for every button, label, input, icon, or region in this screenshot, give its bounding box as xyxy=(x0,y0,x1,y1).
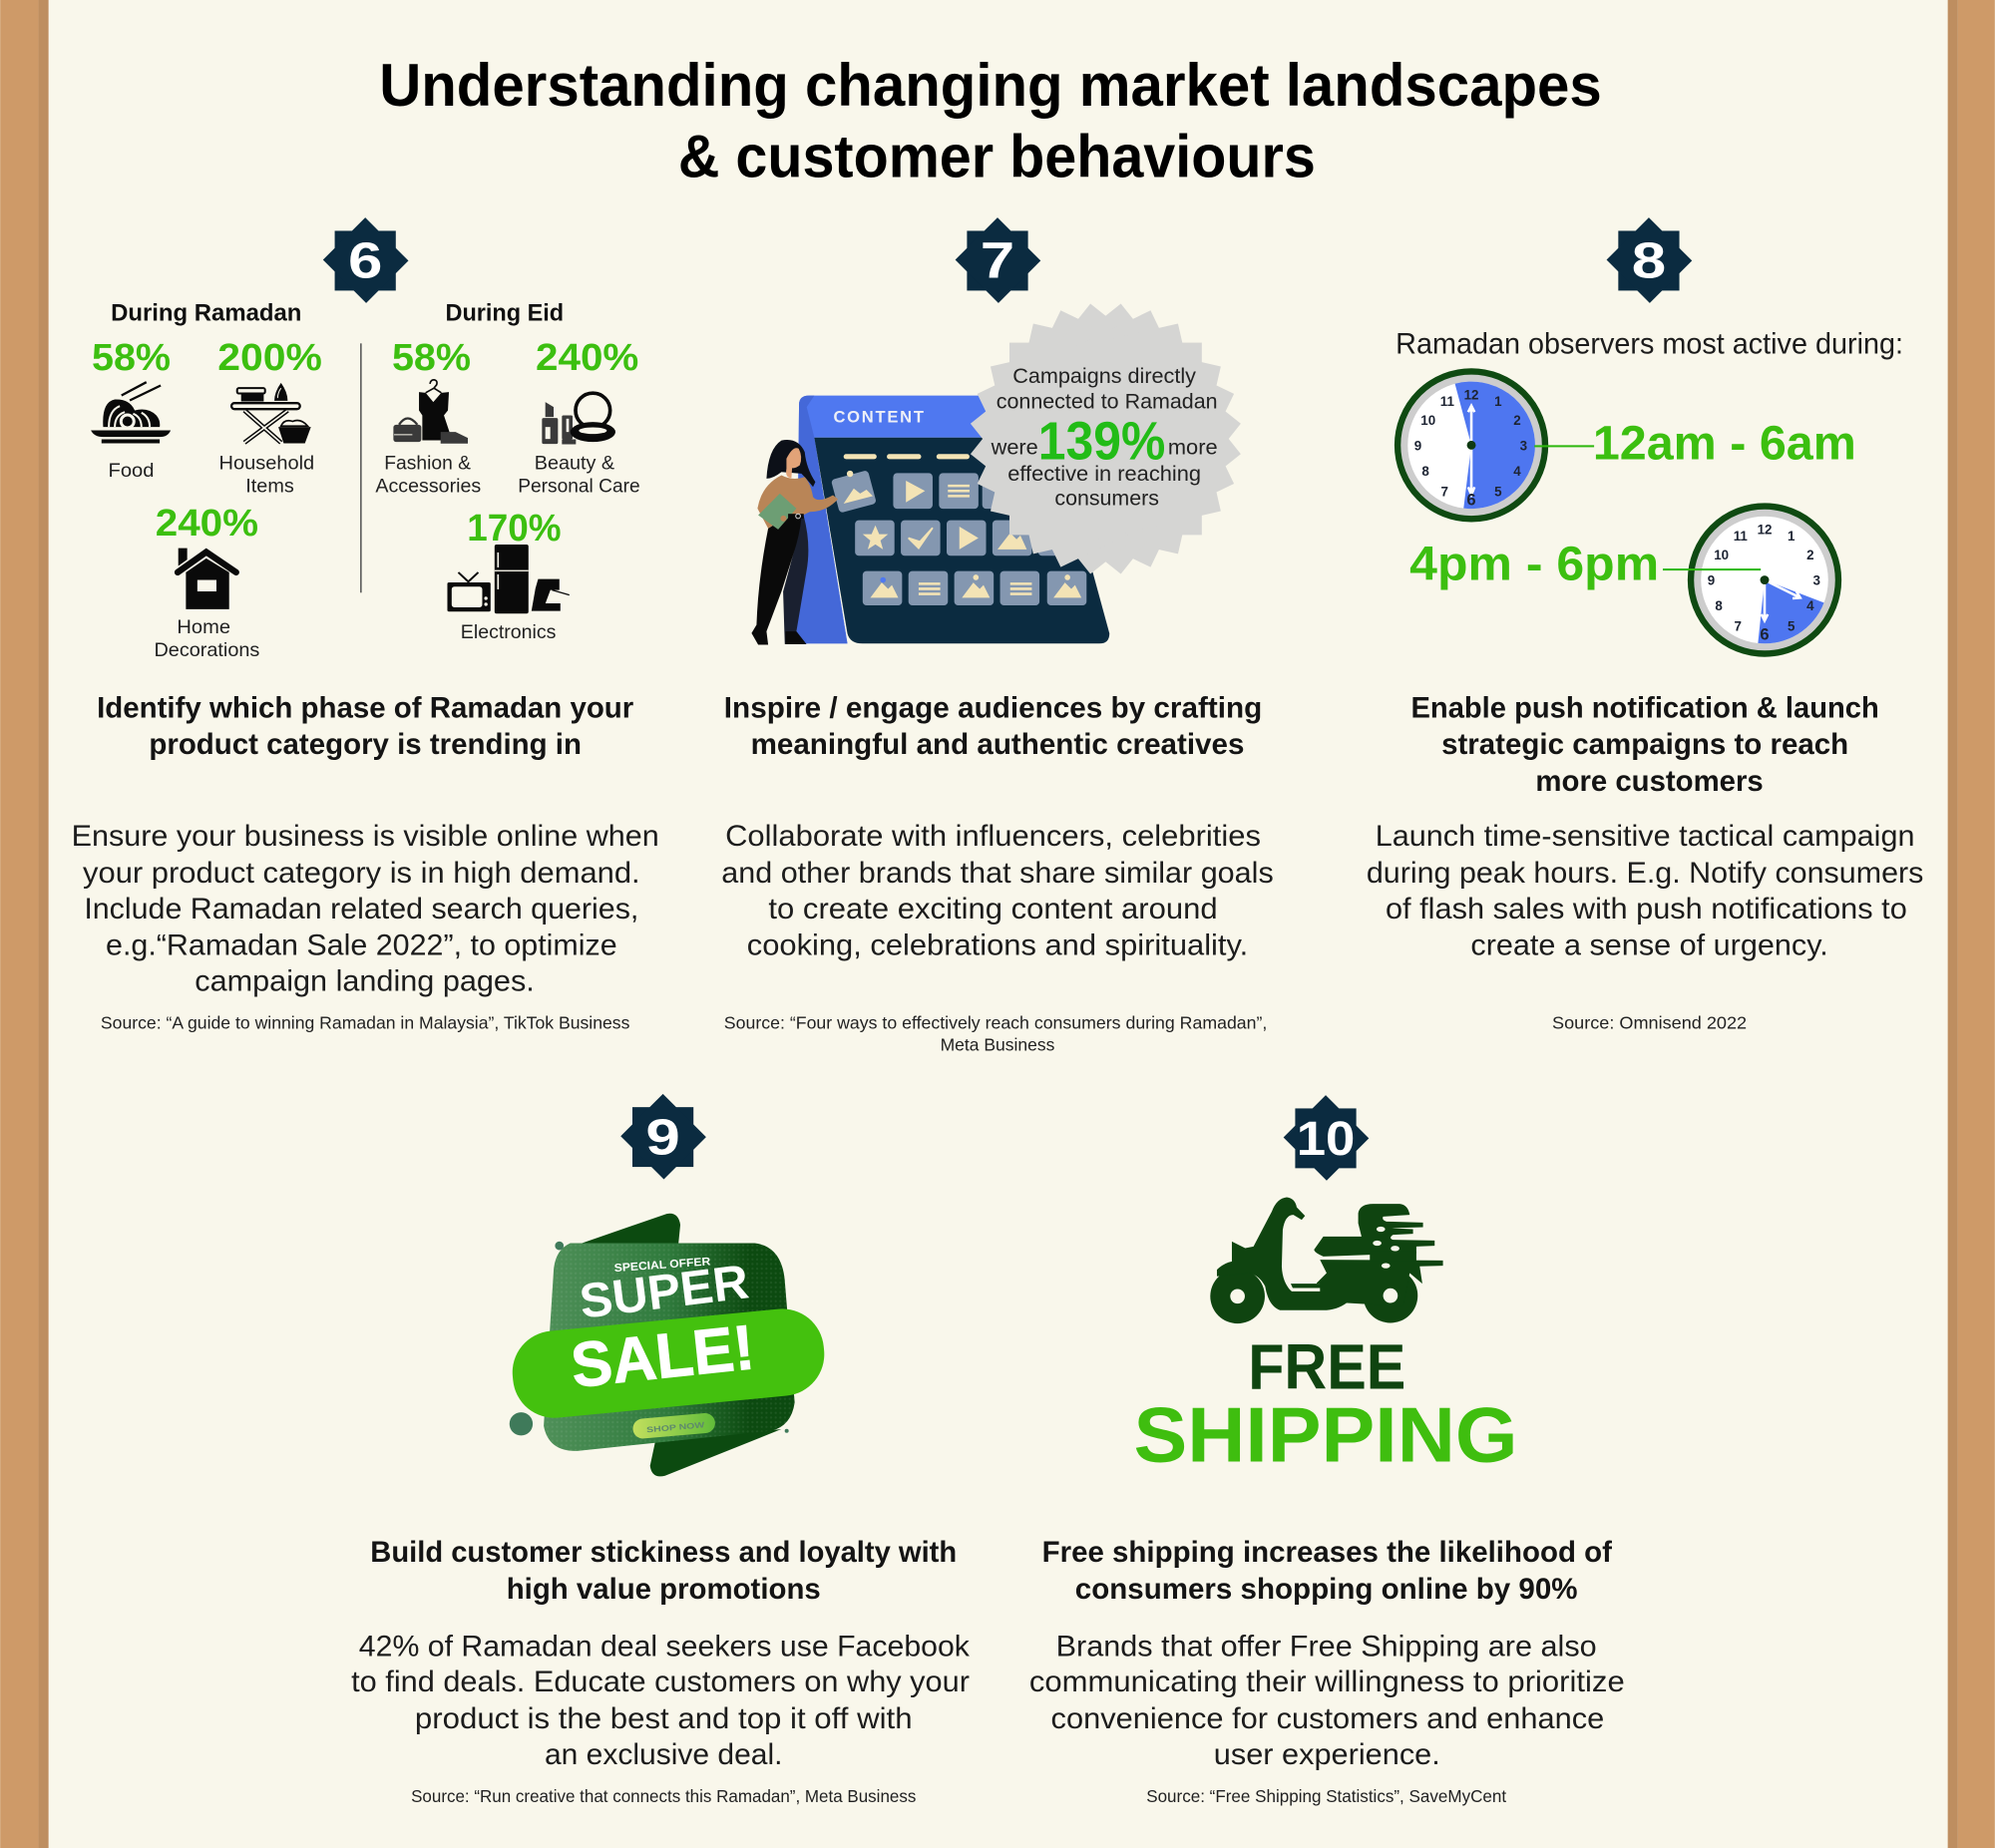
FREE text: FREE xyxy=(1248,1331,1405,1403)
heading 10 xyxy=(1042,1536,1612,1606)
body 6: Ensure your business is visible online when xyxy=(72,820,659,853)
clock 12am-6am: 3 xyxy=(1520,438,1527,453)
body 10: communicating their willingness to prioritize xyxy=(1029,1665,1625,1698)
body 8: Launch time-sensitive tactical campaign xyxy=(1376,820,1914,853)
super sale graphic: SPECIAL OFFER xyxy=(613,1256,711,1275)
body 7: Collaborate with influencers, celebrities xyxy=(725,820,1261,853)
clock 4pm-6pm xyxy=(1691,507,1838,654)
body 10: user experience. xyxy=(1214,1738,1440,1771)
body 6 xyxy=(72,820,659,997)
woman figure xyxy=(751,440,838,645)
clock 12am-6am: 1 xyxy=(1494,394,1502,409)
panel: 8 peak hours xyxy=(1367,217,1923,1033)
super sale graphic: SUPER xyxy=(577,1255,751,1329)
body 7 xyxy=(721,820,1274,962)
clock 12am-6am: 6 xyxy=(1466,490,1476,509)
stat: fashion: 58% xyxy=(392,336,471,379)
SHIPPING text: SHIPPING xyxy=(1133,1392,1518,1478)
clock 4pm-6pm: 12 xyxy=(1758,523,1772,538)
starburst callout: Campaigns directly xyxy=(1012,363,1196,388)
badge 7 xyxy=(956,217,1040,303)
starburst callout: effective in reaching xyxy=(1007,461,1201,486)
badge 9: 9 xyxy=(645,1108,680,1165)
clock 12am-6am: 11 xyxy=(1440,394,1454,409)
left border xyxy=(0,0,49,1848)
heading 8 xyxy=(1410,691,1879,798)
During Eid heading: During Eid xyxy=(446,299,564,325)
clock 12am-6am: 7 xyxy=(1441,484,1448,499)
body 10: Brands that offer Free Shipping are also xyxy=(1056,1630,1597,1663)
clock 4pm-6pm: 1 xyxy=(1788,529,1796,544)
clock 4pm-6pm: 4 xyxy=(1806,598,1814,613)
panel: 9 promotions xyxy=(351,1094,971,1806)
body 6: your product category is in high demand. xyxy=(83,857,640,890)
stat: fashion: Fashion & xyxy=(384,453,471,475)
panel: 7 creatives xyxy=(721,217,1274,1054)
stat: beauty: Beauty & xyxy=(535,453,614,475)
body 10: convenience for customers and enhance xyxy=(1051,1702,1604,1735)
heading 7: Inspire / engage audiences by crafting xyxy=(724,691,1262,724)
clock 12am-6am: 12 xyxy=(1464,387,1478,402)
clock 4pm-6pm: 2 xyxy=(1806,548,1814,562)
stat: beauty: Personal Care xyxy=(518,476,640,498)
stat: household items xyxy=(217,336,322,498)
stat: home decorations: Decorations xyxy=(154,639,259,661)
heading 8: Enable push notification & launch xyxy=(1410,691,1879,724)
label 12am-6am: 12am - 6am xyxy=(1593,416,1856,470)
body 8 xyxy=(1367,820,1923,962)
body 8: create a sense of urgency. xyxy=(1470,929,1828,962)
stat: food xyxy=(91,336,171,482)
stat: household items: Items xyxy=(245,476,294,498)
heading 6: product category is trending in xyxy=(149,728,582,761)
title xyxy=(379,52,1602,189)
starburst callout: were xyxy=(991,434,1038,459)
badge 6: 6 xyxy=(348,232,382,289)
stat: food: 58% xyxy=(92,336,171,379)
source 9: Source: “Run creative that connects this Ramadan”, Meta Business xyxy=(411,1786,916,1806)
super sale graphic xyxy=(509,1214,828,1476)
heading 10: Free shipping increases the likelihood of xyxy=(1042,1536,1612,1569)
stat: fashion: Accessories xyxy=(375,476,481,498)
starburst callout xyxy=(971,303,1241,573)
heading 7 xyxy=(724,691,1262,761)
badge 10: 10 xyxy=(1297,1112,1355,1166)
body 9: 42% of Ramadan deal seekers use Facebook xyxy=(359,1630,971,1663)
body 9 xyxy=(351,1630,971,1771)
title: Understanding changing market landscapes xyxy=(379,52,1602,119)
body 7: and other brands that share similar goals xyxy=(721,857,1274,890)
right border xyxy=(1948,0,1995,1848)
clock 12am-6am: 2 xyxy=(1513,413,1521,428)
stat: home decorations xyxy=(154,502,259,661)
body 6: campaign landing pages. xyxy=(195,964,535,997)
clock 4pm-6pm: 8 xyxy=(1715,598,1723,613)
clock 12am-6am: 4 xyxy=(1513,464,1521,479)
stat: home decorations: 240% xyxy=(156,502,258,545)
stat: beauty xyxy=(518,336,640,498)
source 7: Source: “Four ways to effectively reach consumers during Ramadan”, xyxy=(724,1013,1267,1033)
clock 4pm-6pm: 10 xyxy=(1714,548,1729,562)
stat: food: Food xyxy=(109,460,154,482)
clock 12am-6am: 10 xyxy=(1420,413,1435,428)
body 9: to find deals. Educate customers on why your xyxy=(351,1665,970,1698)
stat: electronics xyxy=(447,507,570,643)
body 10 xyxy=(1029,1630,1625,1771)
super sale graphic: SHOP NOW xyxy=(646,1420,705,1434)
clock 4pm-6pm: 7 xyxy=(1734,619,1742,634)
heading 9 xyxy=(370,1536,957,1606)
divider xyxy=(360,343,362,592)
During Ramadan heading: During Ramadan xyxy=(111,299,301,325)
stat: household items: 200% xyxy=(217,336,322,379)
source 10: Source: “Free Shipping Statistics”, SaveMyCent xyxy=(1146,1786,1506,1806)
badge 10 xyxy=(1284,1095,1369,1181)
calendar illustration: CONTENT xyxy=(833,407,924,426)
body 7: to create exciting content around xyxy=(768,893,1218,925)
clock 4pm-6pm: 6 xyxy=(1760,624,1770,643)
badge 9 xyxy=(620,1094,706,1179)
source 7 xyxy=(724,1013,1267,1054)
heading 8: strategic campaigns to reach xyxy=(1441,728,1848,761)
clock intro text: Ramadan observers most active during: xyxy=(1396,328,1903,361)
heading 6: Identify which phase of Ramadan your xyxy=(97,691,633,724)
badge 6 xyxy=(323,217,408,303)
stat: home decorations: Home xyxy=(177,616,230,638)
starburst callout: consumers xyxy=(1054,485,1159,510)
stat: household items: Household xyxy=(219,453,314,475)
clock 4pm-6pm: 3 xyxy=(1813,573,1820,588)
starburst callout: 139% xyxy=(1038,412,1165,471)
super sale graphic: SALE! xyxy=(568,1312,757,1401)
stat: beauty: 240% xyxy=(536,336,638,379)
body 9: an exclusive deal. xyxy=(545,1738,782,1771)
badge 8 xyxy=(1607,217,1692,303)
source 8: Source: Omnisend 2022 xyxy=(1552,1013,1747,1033)
source 6: Source: “A guide to winning Ramadan in Malaysia”, TikTok Business xyxy=(101,1013,629,1033)
clock 4pm-6pm: 11 xyxy=(1734,529,1748,544)
heading 9: Build customer stickiness and loyalty with xyxy=(370,1536,957,1569)
panel: 10 free shipping xyxy=(1029,1095,1625,1806)
stat: electronics: 170% xyxy=(467,507,562,550)
body 8: during peak hours. E.g. Notify consumers xyxy=(1367,857,1923,890)
badge 8: 8 xyxy=(1632,232,1666,289)
calendar illustration xyxy=(797,396,1109,643)
label 4pm-6pm: 4pm - 6pm xyxy=(1409,538,1659,591)
heading 9: high value promotions xyxy=(507,1573,821,1606)
heading 8: more customers xyxy=(1535,765,1764,798)
clock 12am-6am: 5 xyxy=(1494,484,1502,499)
heading 7: meaningful and authentic creatives xyxy=(751,728,1244,761)
heading 6 xyxy=(97,691,633,761)
stat: electronics: Electronics xyxy=(461,621,557,643)
badge 7: 7 xyxy=(981,232,1014,289)
connector line 1 xyxy=(1534,445,1594,447)
clock 12am-6am xyxy=(1397,371,1545,519)
clock 4pm-6pm: 9 xyxy=(1708,573,1715,588)
panel: 6 product categories xyxy=(72,217,659,1033)
scooter icon xyxy=(1210,1197,1443,1323)
body 7: cooking, celebrations and spirituality. xyxy=(747,929,1248,962)
source 7: Meta Business xyxy=(941,1034,1054,1054)
clock 12am-6am: 9 xyxy=(1414,438,1421,453)
clock 12am-6am: 8 xyxy=(1421,464,1429,479)
stat: fashion xyxy=(375,336,481,498)
body 8: of flash sales with push notifications to xyxy=(1386,893,1907,925)
title: & customer behaviours xyxy=(678,123,1316,189)
body 6: e.g.“Ramadan Sale 2022”, to optimize xyxy=(106,929,617,962)
body 9: product is the best and top it off with xyxy=(415,1702,913,1735)
body 6: Include Ramadan related search queries, xyxy=(84,893,638,925)
connector line 2 xyxy=(1663,568,1761,570)
heading 10: consumers shopping online by 90% xyxy=(1075,1573,1578,1606)
starburst callout: more xyxy=(1168,434,1218,459)
clock 4pm-6pm: 5 xyxy=(1788,619,1796,634)
starburst callout: connected to Ramadan xyxy=(997,388,1218,413)
